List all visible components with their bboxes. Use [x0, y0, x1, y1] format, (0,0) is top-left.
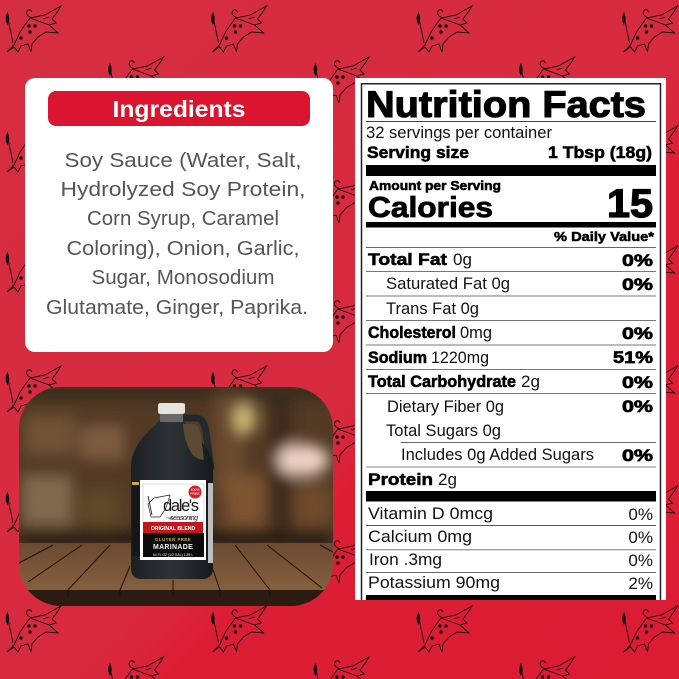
panel: ingredients [25, 78, 333, 352]
servings: 1 Tbsp (18g) [548, 144, 652, 162]
nutrient rows [368, 250, 653, 489]
nutrient rows: Dietary Fiber 0g [387, 397, 504, 416]
vitamins and minerals: 2% [628, 574, 653, 593]
nutrient rows: Saturated Fat 0g [386, 274, 510, 293]
calories: Amount per Serving [369, 179, 501, 193]
photo: marinade bottle on wooden table [19, 385, 333, 606]
bottle label: seasoning [170, 515, 198, 522]
nutrient rows: 0% [622, 251, 653, 270]
bottle label: FREE [190, 492, 200, 496]
ingredients text: Glutamate, Ginger, Paprika. [46, 296, 308, 319]
nutrient rows: Total Carbohydrate [368, 373, 516, 391]
vitamins and minerals: 0% [628, 528, 653, 547]
nutrient rows: 2g [438, 470, 457, 489]
ingredients text: Hydrolyzed Soy Protein, [60, 178, 306, 201]
bottle label: ORIGINAL BLEND [151, 526, 196, 532]
vitamins and minerals: Vitamin D 0mcg [368, 504, 493, 523]
wooden table [19, 543, 333, 606]
nutrient rows: Cholesterol [368, 324, 456, 342]
vitamins and minerals: 0% [628, 551, 653, 570]
calories: Calories [368, 192, 493, 224]
ingredients text [46, 149, 308, 319]
ingredients text: Sugar, Monosodium [92, 266, 274, 289]
calories [368, 179, 653, 226]
nutrient rows: Sodium [368, 349, 427, 367]
blurred bar background [19, 385, 333, 547]
nutrient rows: 0% [622, 373, 653, 392]
bottle label [140, 480, 206, 560]
vitamins and minerals [368, 504, 653, 593]
vitamins and minerals: Calcium 0mg [368, 527, 472, 546]
nutrient rows: 0% [622, 446, 653, 465]
nutrient rows: 0g [453, 250, 472, 269]
nutrient rows: Total Fat [368, 251, 448, 269]
bottle label: MARINADE [153, 544, 193, 551]
nutrient rows: Includes 0g Added Sugars [401, 445, 594, 464]
vitamins and minerals: Iron .3mg [369, 550, 442, 569]
vitamins and minerals: 0% [628, 505, 653, 524]
ingredients text: Soy Sauce (Water, Salt, [64, 149, 302, 172]
nutrient rows: Protein [368, 471, 433, 489]
bottle label: dale's [163, 497, 199, 515]
heading: ingredients pill: Ingredients [112, 96, 246, 122]
bottle label: GLUTEN FREE [155, 537, 191, 542]
dividers [366, 121, 656, 600]
panel: nutrition facts label [355, 78, 666, 600]
bottle label: 100% [191, 488, 199, 492]
nutrient rows: 0% [622, 397, 653, 416]
nutrition title: Nutrition Facts [366, 84, 646, 125]
nutrient rows: Total Sugars 0g [386, 421, 501, 440]
nutrient rows: 2g [521, 372, 540, 391]
nutrient rows: 1220mg [431, 348, 489, 367]
nutrient rows: 51% [613, 348, 653, 367]
nutrient rows: 0% [622, 324, 653, 343]
servings [366, 124, 652, 162]
ingredients text: Coloring), Onion, Garlic, [66, 237, 300, 260]
ingredients text: Corn Syrup, Caramel [87, 207, 279, 230]
bottle label: THE [166, 516, 172, 520]
nutrient rows: 0% [622, 275, 653, 294]
vitamins and minerals: Potassium 90mg [368, 573, 500, 592]
calories: 15 [607, 182, 653, 226]
bottle [131, 403, 213, 579]
servings: Serving size [367, 144, 469, 162]
servings: 32 servings per container [366, 124, 552, 142]
heading: ingredients pill [48, 91, 310, 126]
bottle label: 64 FL OZ (1/2 GAL) 1.89 L [153, 553, 193, 557]
nutrient rows: Trans Fat 0g [386, 299, 479, 318]
daily value header: % Daily Value* [554, 229, 655, 244]
nutrient rows: 0mg [460, 323, 492, 342]
